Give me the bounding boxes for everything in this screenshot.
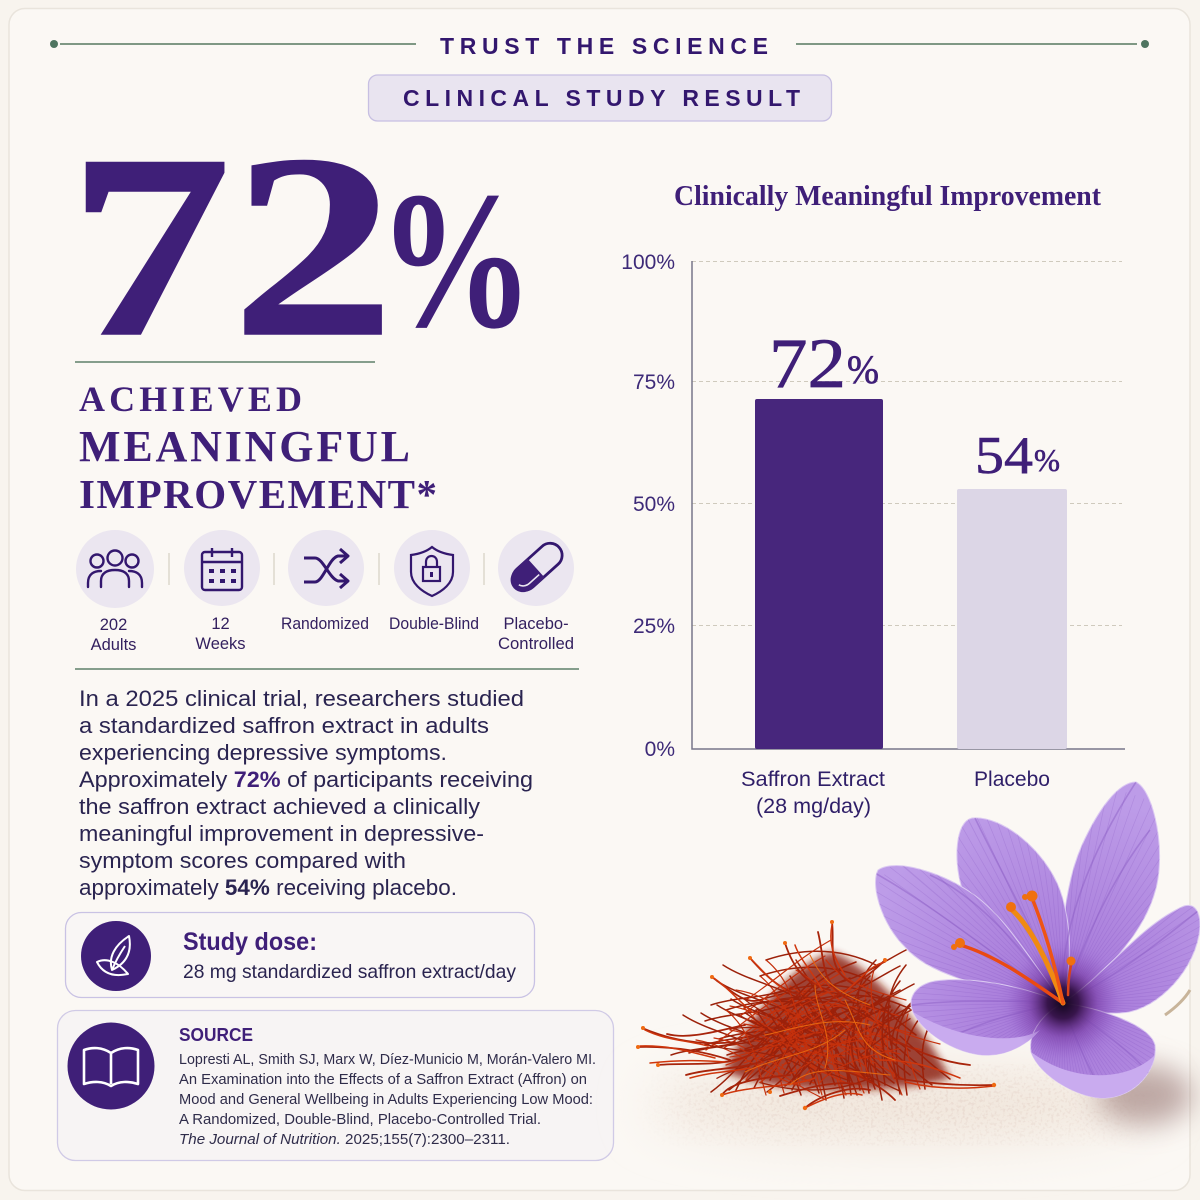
value label: 72%: 72	[769, 325, 846, 403]
headline stat: 72%	[68, 101, 534, 391]
panel: study dose	[66, 912, 534, 998]
headline stat: 72%: 72	[68, 101, 395, 391]
study description text: Approximately 72% of participants receiving	[79, 767, 533, 792]
source citation: The Journal of Nutrition. 2025;155(7):2300–2311.	[179, 1132, 510, 1148]
study description text: symptom scores compared with	[79, 848, 406, 873]
headline: achieved meaningful improvement: ACHIEVED	[79, 379, 302, 419]
fact labels: Weeks	[195, 635, 246, 653]
study description text: In a 2025 clinical trial, researchers studied	[79, 686, 524, 711]
heading rule with title: trust the science	[50, 33, 1149, 59]
fact labels: Double-Blind	[389, 615, 479, 633]
study description text: a standardized saffron extract in adults	[79, 713, 489, 738]
stamens	[951, 890, 1076, 1003]
crocus flower	[875, 782, 1200, 1113]
icon: capsule	[498, 530, 574, 606]
icon: shuffle arrows	[288, 530, 364, 606]
illustration: saffron threads and crocus flower	[636, 782, 1200, 1141]
fact labels: Placebo-	[503, 615, 569, 633]
value label: 54%	[975, 427, 1060, 485]
category labels: Saffron Extract	[741, 768, 885, 791]
axis labels	[621, 251, 675, 761]
category labels: (28 mg/day)	[756, 795, 871, 818]
headline stat: 72%: %	[378, 152, 534, 369]
source citation: Lopresti AL, Smith SJ, Marx W, Díez-Municio M, Morán-Valero MI.	[179, 1052, 596, 1068]
source citation	[179, 1024, 596, 1148]
badge: clinical study result	[368, 75, 832, 121]
fact labels: 202	[100, 616, 127, 634]
dose text	[183, 928, 516, 983]
bar: saffron extract 72%	[755, 399, 883, 749]
source citation: SOURCE	[179, 1024, 253, 1045]
petal veins	[875, 782, 1199, 1113]
ground texture	[650, 990, 1193, 1141]
study description text	[79, 686, 533, 900]
study description text: meaningful improvement in depressive-	[79, 821, 484, 846]
icon: open book	[68, 1022, 154, 1110]
axis labels: 0%	[645, 738, 675, 761]
category labels	[741, 768, 1050, 818]
study description text: experiencing depressive symptoms.	[79, 740, 447, 765]
fact labels: Randomized	[281, 615, 369, 633]
value label: 72%: %	[847, 347, 879, 392]
source citation: A Randomized, Double-Blind, Placebo-Controlled Trial.	[179, 1112, 541, 1128]
icon: leaf sprout	[81, 921, 151, 991]
badge: clinical study result: CLINICAL STUDY RESULT	[403, 85, 800, 111]
fact labels: Controlled	[498, 635, 574, 653]
axis labels: 100%	[621, 251, 675, 274]
bar: placebo 54%	[957, 489, 1067, 749]
saffron thread pile	[636, 920, 996, 1110]
icon: adults	[76, 530, 154, 608]
value label: 54%: %	[1034, 442, 1060, 478]
study description text: approximately 54% receiving placebo.	[79, 875, 457, 900]
headline: achieved meaningful improvement	[79, 379, 437, 517]
icon: shield with lock	[394, 530, 470, 606]
chart title: Clinically Meaningful Improvement	[674, 180, 1101, 212]
heading rule with title: trust the science: TRUST THE SCIENCE	[440, 33, 768, 59]
category labels: Placebo	[974, 768, 1050, 791]
source citation: Mood and General Wellbeing in Adults Experiencing Low Mood:	[179, 1092, 593, 1108]
fact labels: Adults	[91, 636, 136, 654]
value label: 54%: 54	[975, 427, 1033, 485]
value label: 72%	[769, 325, 879, 403]
source citation: An Examination into the Effects of a Saffron Extract (Affron) on	[179, 1072, 587, 1088]
axis labels: 50%	[633, 493, 675, 516]
fact labels	[91, 615, 574, 654]
study facts row	[76, 530, 574, 654]
axis labels: 75%	[633, 371, 675, 394]
panel: source	[58, 1010, 614, 1160]
bar chart	[621, 251, 1125, 818]
study description text: the saffron extract achieved a clinically	[79, 794, 480, 819]
icon: calendar	[184, 530, 260, 606]
axis labels: 25%	[633, 615, 675, 638]
dose text: Study dose:	[183, 928, 317, 956]
fact labels: 12	[211, 615, 230, 633]
headline: achieved meaningful improvement: MEANINGFUL	[79, 422, 410, 471]
dose text: 28 mg standardized saffron extract/day	[183, 961, 516, 983]
headline: achieved meaningful improvement: IMPROVEMENT*	[79, 471, 437, 517]
